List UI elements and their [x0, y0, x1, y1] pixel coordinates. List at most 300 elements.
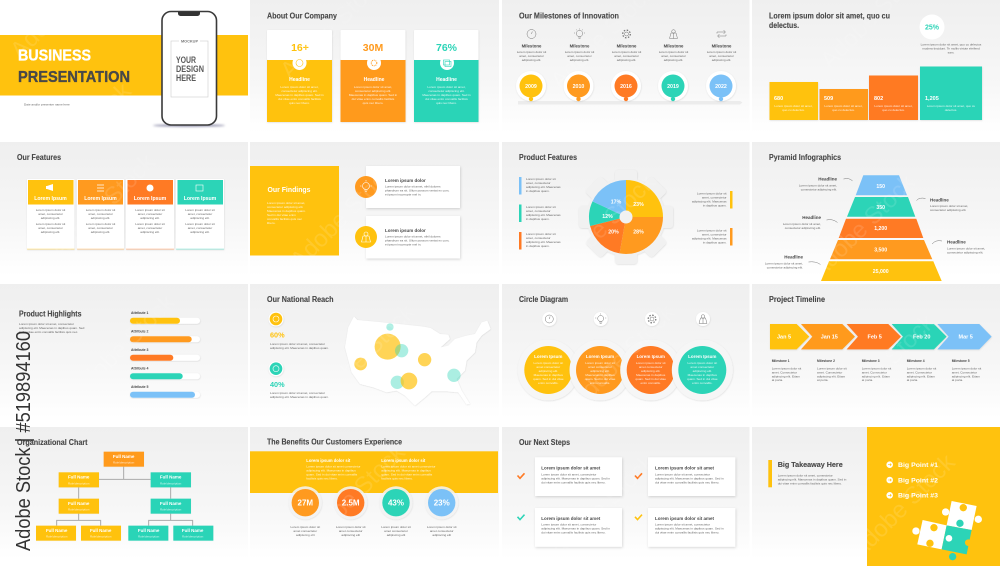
findings block: convallis facilisis quis nec [267, 217, 303, 221]
milestone 4: Lorem ipsum dolor sit [907, 367, 936, 371]
milestone 2010: 2010 [573, 84, 584, 90]
attribute 3 [130, 348, 200, 361]
card: 76%: Maecenas in dapibus quam. Sed in [422, 93, 471, 97]
yellow side panel [867, 427, 1000, 566]
stat 23% [425, 486, 458, 537]
callout 25% [920, 14, 982, 54]
pyramid: 1,200 [874, 226, 887, 232]
callout 25%: Lorem ipsum dolor sit amet, quo cu delectus [921, 42, 982, 46]
pyramid [821, 175, 942, 281]
description: in dui vitae enim convallis facilisis quis nec. [19, 330, 78, 334]
milestone 1 [772, 359, 801, 382]
heading: Lorem ipsum dolor sit amet, quo cu [769, 12, 890, 20]
title: BUSINESS [18, 48, 91, 64]
heading [769, 12, 890, 30]
org tree: Full Name [160, 501, 182, 506]
card: 16+: Lorem ipsum dolor sit amet, [280, 85, 319, 89]
title [18, 48, 130, 86]
card: 16+: quis nec libero. [289, 101, 310, 105]
band text 2: adipiscing elit. Maecenas in dapibus [381, 469, 431, 473]
milestone 1: Milestone 1 [772, 359, 790, 363]
stat 27M: adipiscing elit [296, 533, 315, 537]
stat 43% [380, 486, 412, 537]
panel: next steps [502, 427, 750, 566]
milestone 2010: Milestone [570, 44, 590, 48]
milestone 4: Milestone 4 [907, 359, 925, 363]
milestone 2: at porta. [817, 378, 828, 382]
circle 3: Lorem ipsum dolor sit [636, 361, 666, 365]
milestone 2009: Milestone [522, 44, 542, 48]
milestone 2009: adipiscing elit. [522, 58, 541, 62]
step 1: Lorem ipsum dolor sit amet, consectetur [541, 472, 596, 476]
left note 3 [519, 232, 561, 250]
takeaway heading: Big Takeaway Here [778, 460, 843, 469]
callout 25%: 25% [925, 24, 940, 32]
org tree [36, 452, 213, 541]
heading: Organizational Chart [17, 438, 88, 447]
step 3: adipiscing elit. Maecenas in dapibus quam. Sed in [541, 527, 610, 531]
callout 25%: modera tincidunt. Te mollis virtute eleifend [922, 46, 980, 50]
pie chart: 20% [608, 229, 619, 235]
attribute 4: Attribute 4 [131, 366, 149, 370]
panel: milestones of innovation [502, 0, 750, 140]
stat 2.5M [334, 486, 367, 537]
text: Adobe Stock [545, 448, 661, 564]
org tree: Full Name [138, 528, 160, 533]
left note 2: in dapibus quam. [526, 217, 550, 221]
callout 25,000: Headline [784, 255, 803, 260]
milestone 2010: adipiscing elit. [570, 58, 589, 62]
gear backdrop [579, 170, 673, 264]
left note 1: amet, consectetur [526, 181, 551, 185]
left note 3: Lorem ipsum dolor sit [526, 232, 556, 236]
left note 1 [519, 177, 561, 194]
finding card 2: phaedrum ea sit. Ullum possum veniat ex cum, [385, 238, 449, 242]
card: 30M: consectetur adipiscing elit. [355, 89, 391, 93]
circle 3: adipiscing elit. [641, 369, 661, 373]
callout 25,000: Lorem ipsum dolor sit amet, [765, 262, 803, 266]
card: 30M: 30M [363, 42, 383, 54]
circle 1: adipiscing elit. [539, 369, 558, 373]
band text 1: quam. Sed in dui vitae enim convallis [306, 473, 358, 477]
band text 1: adipiscing elit. Maecenas in dapibus [306, 469, 356, 473]
heading: Our National Reach [267, 295, 334, 304]
pyramid: 25,000 [873, 269, 889, 275]
feature card 4: Lorem ipsum dolor sit [185, 222, 215, 226]
circle 1: Maecenas in dapibus [534, 373, 563, 377]
org tree: Full Name [68, 501, 90, 506]
step 1 [518, 457, 622, 496]
big point 1: Big Point #1 [898, 462, 938, 469]
feature card 4: amet, consectetur [188, 226, 212, 230]
bar 680 [770, 82, 818, 120]
milestone 1: amet. Consectetur [772, 370, 797, 374]
panel: product highlights [0, 284, 248, 425]
panel: organizational chart [0, 427, 248, 566]
card: 16+: 16+ [291, 42, 309, 54]
feature card 1: Lorem ipsum dolor sit [36, 222, 65, 226]
pie chart: 12% [602, 214, 613, 220]
big point 1 [886, 461, 938, 469]
callout 350: Headline [930, 197, 949, 202]
step 2: adipiscing elit. Maecenas in dapibus quam. Sed in [655, 476, 724, 480]
milestone 2 [817, 359, 847, 382]
callout 25,000 [765, 255, 820, 270]
org tree: Full Name [113, 454, 135, 459]
step 1: Lorem ipsum dolor sit amet [541, 465, 601, 470]
step 3: dui vitae enim convallis facilisis quis nec libero. [541, 531, 606, 535]
left note 1: adipiscing elit. Maecenas [526, 185, 561, 189]
circle 4 [672, 312, 733, 400]
left note 3: in dapibus quam. [526, 244, 550, 248]
org tree: Role/description [68, 482, 90, 486]
panel: big takeaway [752, 427, 1000, 566]
circle 4: amet consectetur [690, 365, 714, 369]
milestone 2016: amet, consectetur [614, 54, 639, 58]
milestone 2016 [611, 30, 641, 101]
text: Adobe Stock [565, 298, 681, 414]
milestone 2009: Lorem ipsum dolor sit [517, 50, 546, 54]
findings block: libero. [267, 221, 276, 225]
panel: customer benefits [250, 427, 499, 566]
stat 27M: 27M [298, 499, 313, 508]
feature card 2: Lorem ipsum dolor sit [86, 222, 115, 226]
findings block: Sed in dui vitae enim [267, 213, 296, 217]
feature card 2 [77, 179, 124, 250]
card: 30M: dui vitae enim convallis facilisis [352, 97, 395, 101]
right note 2: adipiscing elit. Maecenas [692, 236, 727, 240]
milestone 3: Milestone 3 [862, 359, 880, 363]
callout 25,000: consectetur adipiscing elit. [767, 266, 803, 270]
callout 3,500: consectetur adipiscing elit. [947, 251, 983, 255]
panel: circle diagram [502, 284, 750, 425]
stat 40%: Lorem ipsum dolor sit amet, consectetur [270, 391, 325, 395]
circle 4: Lorem ipsum dolor sit [688, 361, 717, 365]
arrow chain [770, 324, 992, 349]
left note 3: adipiscing elit. Maecenas [526, 240, 561, 244]
step 2: dui vitae enim convallis facilisis quis nec libero. [655, 480, 719, 484]
org tree: Full Name [46, 528, 68, 533]
step 3: Lorem ipsum dolor sit amet [541, 516, 601, 521]
feature card 1: Lorem ipsum dolor sit [36, 208, 65, 212]
heading: Our Next Steps [519, 438, 570, 447]
milestone 2010 [564, 28, 594, 101]
phone mockup: MOCKUP [181, 40, 198, 44]
heading: Project Timeline [769, 295, 825, 304]
band text 2: quam. Sed in dui vitae enim convallis [381, 473, 433, 477]
milestone 2022: Lorem ipsum dolor sit [707, 50, 736, 54]
panel: our findings [250, 142, 499, 283]
right note 1: adipiscing elit. Maecenas [692, 200, 727, 204]
card: 16+: dui vitae enim convallis facilisis [278, 97, 321, 101]
milestone 3: amet. Consectetur [862, 370, 887, 374]
attribute 2: Attribute 2 [131, 330, 149, 334]
text: Adobe Stock [805, 168, 921, 284]
org tree: Role/description [68, 508, 90, 512]
heading: The Benefits Our Customers Experience [267, 438, 402, 446]
feature card 2: adipiscing elit. [91, 216, 110, 220]
milestone 2022 [706, 30, 736, 101]
feature card 1: adipiscing elit. [41, 216, 60, 220]
left note 2 [519, 204, 561, 222]
heading: Product Features [519, 153, 577, 162]
pie chart: 17% [611, 200, 622, 206]
card: 30M [340, 30, 406, 122]
card: 76%: Headline [436, 77, 457, 83]
heading: Our Milestones of Innovation [519, 12, 619, 20]
bar 680: 680 [774, 96, 783, 102]
feature card 4: Lorem Ipsum [184, 196, 217, 202]
heading: Our Features [17, 153, 61, 162]
stat 2.5M: amet consectetur [339, 529, 363, 533]
attribute 1: Attribute 1 [131, 311, 149, 315]
callout 25%: sam. [948, 50, 954, 54]
callout 1,200: Lorem ipsum dolor sit amet, [783, 222, 821, 226]
step 2: Lorem ipsum dolor sit amet [655, 465, 715, 470]
milestone 2016: Lorem ipsum dolor sit [612, 50, 641, 54]
feature card 4: amet, consectetur [188, 212, 212, 216]
callout 3,500: Headline [947, 240, 966, 245]
milestone 3: at porta. [862, 378, 873, 382]
milestone 5: amet. Consectetur [952, 370, 977, 374]
pie chart: 23% [633, 202, 644, 208]
findings block: Lorem ipsum dolor sit amet, [267, 201, 305, 205]
step 4: Lorem ipsum dolor sit amet, consectetur [655, 523, 710, 527]
feature card 3: Lorem ipsum dolor sit [135, 208, 165, 212]
step 2 [635, 457, 735, 496]
right note 2: amet, consectetur [702, 232, 726, 236]
attribute 4 [130, 366, 200, 379]
right note 1: amet, consectetur [702, 196, 726, 200]
feature card 1: amet, consectetur [38, 212, 63, 216]
bar 1,205: delectus. [945, 108, 957, 112]
bar 1,205: Lorem ipsum dolor sit amet, quo cu [927, 104, 975, 108]
feature card 4 [176, 179, 224, 250]
org tree: Full Name [68, 475, 90, 480]
pyramid: 3,500 [874, 248, 887, 254]
card: 16+: Maecenas in dapibus quam. Sed in [275, 93, 324, 97]
left note 2: adipiscing elit. Maecenas [526, 213, 561, 217]
stat 60%: 60% [270, 330, 285, 339]
milestone 2019 [658, 30, 688, 101]
milestone 2019: Milestone [664, 44, 684, 48]
heading: delectus. [769, 21, 799, 30]
circle 3: amet consectetur [639, 365, 663, 369]
milestone 4: at porta. [907, 378, 918, 382]
circle 4: quam. Sed in dui vitae [687, 377, 718, 381]
band text 2 [381, 458, 435, 481]
band text 1: Lorem ipsum dolor sit amet consectetur [306, 465, 360, 469]
feature card 2: adipiscing elit. [91, 230, 110, 234]
arrow chain: Jan 5 [777, 335, 791, 341]
yellow band [250, 451, 498, 493]
circle 4: Maecenas in dapibus [688, 373, 717, 377]
finding card 1: et ipsum incorrupte mel in. [385, 192, 421, 196]
right note 2 [692, 228, 732, 246]
feature card 2: amet, consectetur [88, 226, 113, 230]
feature card 2: Lorem Ipsum [84, 196, 117, 202]
feature card 3: adipiscing elit. [140, 230, 160, 234]
milestone 2: Milestone 2 [817, 359, 835, 363]
band text 1: facilisis quis nec libero. [306, 477, 338, 481]
stat 40%: adipiscing elit. Maecenas in dapibus quam. [270, 395, 329, 399]
panel: pyramid infographics [752, 142, 1000, 283]
stat 40% [268, 361, 329, 399]
step 1: adipiscing elit. Maecenas in dapibus quam. Sed in [541, 476, 610, 480]
stat 40%: 40% [270, 380, 285, 389]
text: Adobe Stock [65, 288, 181, 404]
left note 3: amet, consectetur [526, 236, 551, 240]
text: Adobe Stock [305, 298, 421, 414]
card: 30M: Maecenas in dapibus quam. Sed in [349, 93, 397, 97]
heading: Pyramid Infographics [769, 153, 841, 162]
bar 802: quo cu delectus. [882, 108, 905, 112]
finding card 1: phaedrum ea sit. Ullum possum veniat ex cum, [385, 188, 449, 192]
callout 3,500 [932, 240, 985, 255]
feature card 3: amet, consectetur [138, 212, 162, 216]
bar 509 [820, 89, 868, 120]
milestone 2022: 2022 [715, 84, 727, 90]
callout 150: consectetur adipiscing elit. [801, 188, 837, 192]
big point 3: Big Point #3 [898, 493, 938, 500]
callout 1,200: Headline [802, 215, 821, 220]
left note 1: Lorem ipsum dolor sit [526, 177, 556, 181]
bar 1,205 [920, 66, 982, 120]
stat 43%: 43% [388, 499, 404, 508]
org tree: Role/description [46, 535, 68, 539]
heading: Circle Diagram [519, 295, 568, 304]
takeaway body: adipiscing elit. Maecenas in dapibus quam. Sed in [778, 477, 847, 481]
org tree: Role/description [113, 461, 135, 465]
stat 23%: Lorem ipsum dolor sit [427, 525, 457, 529]
bar 802: 802 [874, 96, 883, 102]
milestone 2010: amet, consectetur [567, 54, 592, 58]
panel: our features [0, 142, 248, 283]
feature card 2: Lorem ipsum dolor sit [86, 208, 115, 212]
stat 60%: Lorem ipsum dolor sit amet, consectetur [270, 342, 325, 346]
milestone 1: adipiscing elit. Etiam [772, 374, 800, 378]
stat 23%: amet consectetur [430, 529, 454, 533]
title band [0, 35, 248, 96]
milestone 4: adipiscing elit. Etiam [907, 374, 935, 378]
callout 150: Lorem ipsum dolor sit amet, [799, 184, 837, 188]
stat 43%: amet consectetur [384, 529, 408, 533]
right note 1 [692, 191, 732, 208]
card: 76%: 76% [436, 42, 458, 54]
circle 4: Lorem Ipsum [688, 354, 716, 359]
circle 3: quam. Sed in dui vitae [635, 377, 666, 381]
bar 1,205: 1,205 [925, 96, 939, 102]
phone mockup: HERE [176, 73, 196, 83]
card: 76%: consectetur adipiscing elit. [428, 89, 465, 93]
step 4: Lorem ipsum dolor sit amet [655, 516, 715, 521]
attribute 3: Attribute 3 [131, 348, 149, 352]
pyramid: 150 [876, 184, 885, 190]
text: Adobe Stock [825, 308, 941, 424]
milestone 2009: 2009 [525, 84, 537, 90]
circle 2: Lorem Ipsum [586, 354, 614, 359]
milestone 3 [862, 359, 891, 382]
arrow chain: Mar 5 [959, 335, 973, 341]
stat 43%: adipiscing elit [387, 533, 405, 537]
milestone 3: Lorem ipsum dolor sit [862, 367, 891, 371]
callout 1,200: consectetur adipiscing elit. [785, 226, 821, 230]
bar 509: Lorem ipsum dolor sit amet, [824, 104, 863, 108]
text: Adobe Stock [545, 168, 661, 284]
org tree: Role/description [90, 535, 112, 539]
milestone 2010: Lorem ipsum dolor sit [565, 50, 594, 54]
presenter line: Date and/or presenter name here [24, 102, 70, 106]
pyramid: 350 [876, 205, 885, 211]
findings block: consectetur adipiscing elit. [267, 205, 303, 209]
attribute 1 [130, 311, 200, 324]
panel: about our company [250, 0, 499, 140]
band text 2: Lorem ipsum dolor sit [381, 458, 426, 463]
card: 30M: quis nec libero. [363, 101, 384, 105]
stat 60% [268, 312, 329, 350]
finding card 2 [355, 216, 460, 258]
card: 16+: Headline [289, 77, 310, 83]
panel: title slide [0, 12, 248, 127]
card: 76% [414, 30, 478, 122]
takeaway body: dui vitae enim convallis facilisis quis nec libero. [778, 481, 842, 485]
US map with bubbles [345, 316, 491, 406]
finding card 1: Lorem ipsum dolor sit amet, nihil dolores [385, 184, 441, 188]
callout 150: Headline [818, 176, 837, 181]
milestone 5: adipiscing elit. Etiam [952, 374, 980, 378]
text: Adobe Stock [295, 438, 411, 554]
org tree: Full Name [160, 475, 182, 480]
left note 1: in dapibus quam. [526, 189, 550, 193]
text: Adobe Stock [845, 448, 961, 564]
feature card 1: amet, consectetur [38, 226, 63, 230]
bar 802: Lorem ipsum dolor sit amet, [874, 104, 913, 108]
circle 2: amet consectetur [588, 365, 612, 369]
pie chart [589, 180, 663, 254]
big point 2: Big Point #2 [898, 477, 938, 484]
org tree: Role/description [182, 535, 204, 539]
callout 350: Lorem ipsum dolor sit amet, [930, 204, 968, 208]
org tree: Role/description [160, 508, 182, 512]
card: 76%: quis nec libero. [436, 101, 457, 105]
takeaway body: Lorem ipsum dolor sit amet, consectetur [778, 473, 833, 477]
card: 16+ [267, 30, 332, 122]
stat 2.5M: 2.5M [342, 499, 360, 508]
feature card 3: adipiscing elit. [140, 216, 160, 220]
phone mockup: DESIGN [176, 64, 204, 74]
milestone 5: Lorem ipsum dolor sit [952, 367, 981, 371]
stat 23%: 23% [434, 499, 450, 508]
circle 2: Lorem ipsum dolor sit [585, 361, 615, 365]
feature card 4: Lorem ipsum dolor sit [185, 208, 215, 212]
milestone 2022: amet, consectetur [709, 54, 734, 58]
circle 4: adipiscing elit. [693, 369, 712, 373]
feature card 1: Lorem Ipsum [34, 196, 67, 202]
feature card 3: Lorem ipsum dolor sit [135, 222, 165, 226]
bar 680: quo cu delectus. [782, 108, 805, 112]
findings block: Maecenas in dapibus quam. [267, 209, 306, 213]
callout 3,500: Lorem ipsum dolor sit amet, [947, 247, 985, 251]
title: PRESENTATION [18, 69, 130, 86]
phone mockup [153, 12, 225, 127]
step 4 [635, 508, 735, 547]
left note 2: Lorem ipsum dolor sit [526, 205, 556, 209]
milestone 2009: amet, consectetur [519, 54, 544, 58]
stat 27M: Lorem ipsum dolor sit [291, 525, 320, 529]
milestone 2022: Milestone [712, 44, 732, 48]
step 3 [518, 508, 622, 547]
milestone 4 [907, 359, 936, 382]
